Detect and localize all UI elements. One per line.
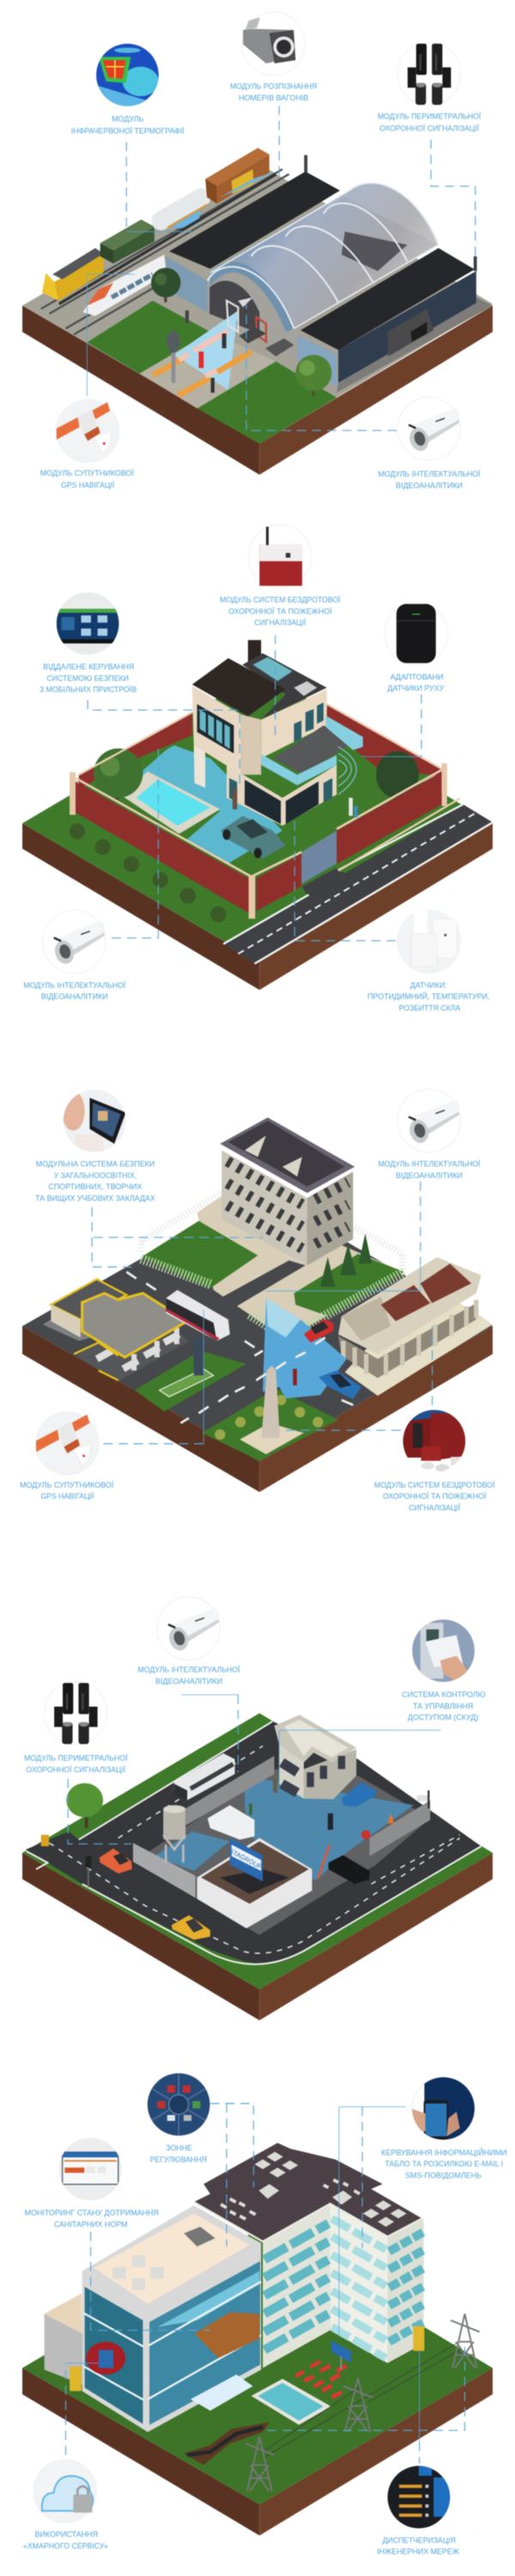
- plaza: benches, video analytics beam and people: [153, 297, 294, 395]
- label: zone control: РЕГУЛЮВАННЯ: [150, 2155, 207, 2164]
- label: sanitary monitoring: МОНІТОРИНГ СТАНУ ДОТРИМАННЯ: [25, 2208, 159, 2217]
- ground platform: [22, 166, 493, 475]
- pool: [251, 2379, 331, 2425]
- icon: engineering dispatch screen: [386, 2464, 451, 2530]
- cars and pedestrian: [293, 1319, 361, 1399]
- label: information boards: КЕРВУВАННЯ ІНФОРМАЦІЙНИМИ: [381, 2148, 506, 2157]
- label: video analytics: МОДУЛЬ ІНТЕЛЕКТУАЛЬНОЇ: [138, 1666, 240, 1674]
- label: video analytics: ВІДЕОАНАЛІТИКИ: [41, 993, 108, 1001]
- icon: perimeter sensors: [397, 42, 461, 106]
- section 5: smart office building: [22, 2072, 506, 2556]
- ground platform: [22, 1191, 493, 1492]
- label: wireless alarm: [374, 1480, 495, 1512]
- icon: white camera: [157, 1597, 220, 1660]
- main office building: [275, 1715, 356, 1799]
- label: thermography: [71, 115, 185, 135]
- icon: control panel: [55, 591, 120, 657]
- glass block: [82, 2205, 261, 2432]
- label: zone control: ЗОННЕ: [166, 2143, 192, 2152]
- bushes: [70, 823, 227, 922]
- label: wireless alarm: СИГНАЛІЗАЦІЇ: [409, 1504, 461, 1512]
- label: wireless alarm: МОДУЛЬ СИСТЕМ БЕЗДРОТОВОЇ: [374, 1480, 495, 1489]
- trees: [94, 749, 419, 799]
- leader lines: [87, 106, 476, 430]
- label: GPS navigation: МОДУЛЬ СУПУТНИКОВОЇ: [20, 1480, 114, 1489]
- car: [221, 816, 286, 859]
- label: educational security: СПОРТИВНИХ, ТВОРЧИХ: [48, 1182, 142, 1191]
- label: wireless alarm: СИГНАЛІЗАЦІЇ: [254, 618, 306, 627]
- icon: tablet user: [62, 1088, 127, 1153]
- tree: [66, 1783, 103, 1828]
- label: access control: [402, 1690, 486, 1722]
- label: perimeter alarm: МОДУЛЬ ПЕРИМЕТРАЛЬНОЇ: [24, 1754, 128, 1763]
- label: motion sensors: АДАПТОВАНИ: [391, 672, 444, 681]
- label: wireless alarm: МОДУЛЬ СИСТЕМ БЕЗДРОТОВОЇ: [220, 595, 341, 604]
- ground platform: [22, 2228, 493, 2536]
- label: zone control: [150, 2143, 207, 2164]
- section 1: railway station: [22, 12, 493, 490]
- label: GPS navigation: GPS НАВІГАЦІЇ: [40, 1492, 94, 1501]
- trees: [320, 1233, 372, 1286]
- tower: [194, 2143, 424, 2368]
- label: access control: СИСТЕМА КОНТРОЛЮ: [402, 1690, 486, 1698]
- label: wagon number recognition: МОДУЛЬ РОЗПІЗНАННЯ: [230, 82, 317, 90]
- label: video analytics: МОДУЛЬ ІНТЕЛЕКТУАЛЬНОЇ: [379, 470, 481, 478]
- train: locomotive and wagons: [42, 148, 276, 304]
- label: access control: ТА УПРАВЛІННЯ: [413, 1702, 473, 1710]
- label: cloud service: [23, 2530, 108, 2550]
- label: video analytics: МОДУЛЬ ІНТЕЛЕКТУАЛЬНОЇ: [379, 1159, 481, 1168]
- bus: [174, 1753, 235, 1801]
- asphalt roads: [26, 1722, 482, 1964]
- label: dispatching: [377, 2536, 459, 2556]
- ground platform: [22, 683, 493, 990]
- icon: white sensors: [397, 910, 460, 973]
- label: wireless alarm: ОХОРОННОЇ ТА ПОЖЕЖНОЇ: [228, 607, 332, 616]
- icon: red wireless panel: [248, 525, 312, 588]
- label: video analytics: [379, 1159, 481, 1180]
- lower office with billboard: [197, 1838, 312, 1929]
- school building: [220, 1117, 354, 1266]
- label: sensors: РОЗБИТТЯ СКЛА: [399, 1004, 460, 1012]
- label: motion sensors: [388, 672, 445, 693]
- icon: motion sensor: [385, 602, 448, 665]
- icon: zone control: [146, 2072, 211, 2137]
- icon: thermal image: [94, 42, 161, 108]
- icon: satellite: [56, 399, 119, 463]
- icon: phone with dashboard: [410, 2075, 476, 2142]
- awning: [191, 2374, 253, 2411]
- house: [192, 640, 363, 826]
- glass arch hall: [208, 183, 439, 358]
- label: wireless alarm: ОХОРОННОЇ ТА ПОЖЕЖНОЇ: [383, 1492, 487, 1501]
- label: perimeter alarm: ОХОРОННОЇ СИГНАЛІЗАЦІЇ: [379, 124, 480, 132]
- ground platform: [22, 1713, 493, 2020]
- label: thermography: МОДУЛЬ: [112, 115, 144, 124]
- label: GPS navigation: [20, 1480, 114, 1501]
- walled yard lawn and inner walls: [77, 673, 442, 878]
- billboard: [331, 2340, 351, 2370]
- icon: white camera: [43, 910, 106, 973]
- label: educational security: ТА ВИЩИХ УЧБОВИХ ЗАКЛАДАХ: [35, 1194, 155, 1203]
- label: educational security: У ЗАГАЛЬНООСВІТНІХ,: [54, 1171, 136, 1180]
- icon: perimeter sensors: [45, 1681, 107, 1745]
- label: video analytics: ВІДЕОАНАЛІТИКИ: [396, 1171, 463, 1180]
- label: remote control: [39, 662, 136, 694]
- leader lines: [92, 1182, 433, 1443]
- icon: access card: [410, 1618, 476, 1684]
- road markings: [49, 1746, 460, 1953]
- label: sensors: [367, 981, 490, 1012]
- power pylons: [245, 2314, 480, 2491]
- lower lawns, planter and square: [135, 1338, 338, 1461]
- station building: [166, 155, 493, 392]
- leader lines: [68, 1695, 441, 1844]
- icon: satellite: [36, 1412, 99, 1475]
- high speed train: [82, 255, 166, 316]
- cars: [100, 1783, 376, 1940]
- obelisk: [262, 1365, 280, 1437]
- fences: [133, 1756, 430, 1898]
- icon: grey camera: [242, 12, 305, 76]
- people and motion waves: [233, 747, 357, 817]
- interior cutaway: valves: [86, 2342, 125, 2374]
- outer wall and gate: [70, 704, 460, 919]
- label: dispatching: ІНЖЕНЕРНИХ МЕРЕЖ: [377, 2548, 459, 2556]
- label: sensors: ПРОТИДИМНИЙ, ТЕМПЕРАТУРИ,: [367, 992, 490, 1001]
- icon: white camera: [397, 1089, 460, 1152]
- camera coverage area: [263, 1298, 347, 1399]
- lower office with billboard: STAGROUP: [227, 1847, 264, 1871]
- section 4: industrial site: [22, 1597, 493, 2020]
- label: wagon number recognition: НОМЕРІВ ВАГОНІВ: [239, 94, 308, 102]
- label: perimeter alarm: ОХОРОННОЇ СИГНАЛІЗАЦІЇ: [26, 1765, 126, 1774]
- label: wireless alarm: [220, 595, 341, 627]
- label: cloud service: ВИКОРИСТАННЯ: [35, 2530, 98, 2538]
- rooftop units: [112, 2256, 164, 2290]
- icon: fire alarm kit: [402, 1408, 467, 1474]
- label: sanitary monitoring: [25, 2208, 159, 2229]
- label: perimeter alarm: [24, 1754, 128, 1774]
- label: video analytics: ВІДЕОАНАЛІТИКИ: [396, 482, 463, 490]
- label: video analytics: МОДУЛЬ ІНТЕЛЕКТУАЛЬНОЇ: [23, 981, 126, 989]
- icon: cloud with lock: [33, 2460, 96, 2523]
- label: information boards: ТАБЛО ТА РОЗСИЛКОЮ E-MAIL І: [385, 2160, 503, 2168]
- label: educational security: [35, 1159, 155, 1203]
- label: sanitary monitoring: САНІТАРНИХ НОРМ: [54, 2221, 127, 2229]
- label: video analytics: ВІДЕОАНАЛІТИКИ: [155, 1677, 222, 1686]
- pool: [120, 771, 220, 834]
- courtyard, lawns and fences: [142, 1193, 404, 1340]
- label: sensors: ДАТЧИКИ:: [410, 981, 447, 989]
- road: [223, 805, 493, 963]
- annex: [45, 2293, 82, 2385]
- label: GPS navigation: МОДУЛЬ СУПУТНИКОВОЇ: [40, 469, 134, 477]
- camera coverage and driveway: [138, 745, 282, 864]
- icon: white camera: [397, 398, 460, 460]
- label: remote control: З МОБІЛЬНИХ ПРИСТРОЇВ: [39, 685, 136, 694]
- icon: climate monitor: [59, 2138, 122, 2200]
- trees and lamp: [151, 268, 331, 396]
- label: GPS navigation: GPS НАВІГАЦІЇ: [61, 481, 115, 489]
- label: wagon number recognition: [230, 82, 317, 102]
- temple building: [338, 1257, 493, 1396]
- pipe trench: [184, 2422, 270, 2465]
- yellow boxes: [70, 2326, 424, 2391]
- people, gate and signs: [41, 1779, 428, 1887]
- label: access control: ДОСТУПОМ (СКУД): [408, 1713, 478, 1722]
- label: educational security: МОДУЛЬНА СИСТЕМА БЕЗПЕКИ: [36, 1159, 154, 1168]
- label: motion sensors: ДАТЧИКИ РУХУ: [388, 684, 445, 693]
- label: GPS navigation: [40, 469, 134, 489]
- label: perimeter alarm: [378, 112, 482, 132]
- label: remote control: СИСТЕМОЮ БЕЗПЕКИ: [46, 674, 129, 683]
- label: information boards: [381, 2148, 506, 2180]
- label: video analytics: [138, 1666, 240, 1686]
- leader lines: [66, 2104, 464, 2464]
- label: information boards: SMS-ПОВІДОМЛЕНЬ: [405, 2172, 482, 2180]
- yard with camera coverage: [135, 1769, 430, 1935]
- gas station: [43, 1279, 189, 1382]
- label: thermography: ІНФРАЧЕРВОНОЇ ТЕРМОГРАФІЇ: [71, 126, 185, 135]
- label: remote control: ВІДДАЛЕНЕ КЕРУВАННЯ: [43, 662, 134, 671]
- section 2: private house: [22, 525, 493, 1012]
- sun loungers: [295, 2361, 347, 2397]
- leader lines: [88, 635, 421, 941]
- power lines: [263, 2343, 460, 2458]
- section 3: city block and school: [20, 1088, 495, 1512]
- interior cutaway: office: [195, 2312, 259, 2358]
- trolleybus: [166, 1290, 230, 1341]
- van and silo: [163, 1805, 255, 1862]
- road markings: [126, 1272, 353, 1423]
- label: video analytics: [379, 470, 481, 490]
- label: perimeter alarm: МОДУЛЬ ПЕРИМЕТРАЛЬНОЇ: [378, 112, 482, 121]
- label: video analytics: [23, 981, 126, 1001]
- road edge lines: [27, 1722, 482, 1965]
- label: cloud service: «ХМАРНОГО СЕРВІСУ»: [23, 2542, 108, 2550]
- label: dispatching: ДИСПЕТЧЕРИЗАЦІЯ: [383, 2536, 456, 2544]
